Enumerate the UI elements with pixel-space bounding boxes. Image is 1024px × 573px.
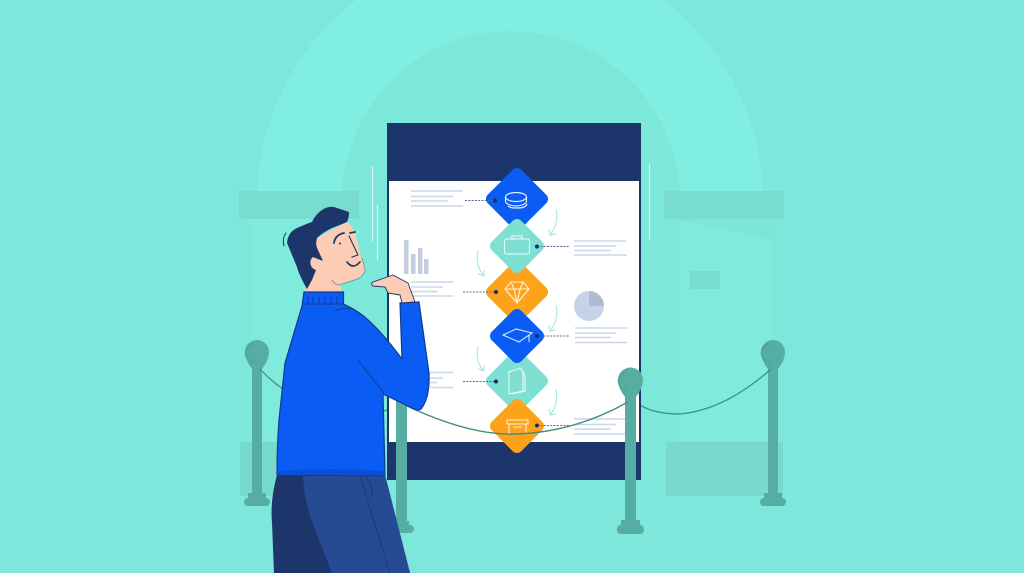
rear rope segments xyxy=(260,369,771,414)
diamond: blue graduation cap xyxy=(488,307,546,365)
hand xyxy=(372,275,415,303)
icon: coins xyxy=(506,192,527,208)
hair strand xyxy=(283,233,286,246)
motion lines xyxy=(372,164,650,260)
icon: briefcase xyxy=(504,236,530,254)
diamond: teal document xyxy=(483,347,551,415)
man xyxy=(272,207,429,573)
hair xyxy=(287,207,349,289)
neck and face xyxy=(305,222,365,293)
rear stanchion right xyxy=(760,340,786,506)
icon: box xyxy=(507,420,528,434)
sweater xyxy=(277,292,429,475)
icon: graduation cap xyxy=(503,329,532,342)
diamond: blue coins xyxy=(483,165,551,233)
diamond: teal briefcase xyxy=(488,217,546,275)
curved arrows xyxy=(477,209,557,415)
text placeholder lines xyxy=(411,191,627,434)
pie chart xyxy=(574,291,604,321)
trousers xyxy=(272,475,410,573)
bar chart xyxy=(404,240,428,274)
diamond: orange box xyxy=(488,397,546,455)
dashed connectors and dots xyxy=(463,198,570,428)
front stanchion left xyxy=(392,385,414,533)
front rope xyxy=(405,402,628,434)
diamond: orange gem xyxy=(483,258,551,326)
front stanchion centre xyxy=(617,368,644,534)
rear stanchion left xyxy=(244,340,270,506)
background: wall panels xyxy=(239,191,784,496)
ear xyxy=(311,257,318,269)
icon: gem xyxy=(505,282,529,303)
poster board xyxy=(387,123,641,480)
icon: document xyxy=(509,368,525,394)
